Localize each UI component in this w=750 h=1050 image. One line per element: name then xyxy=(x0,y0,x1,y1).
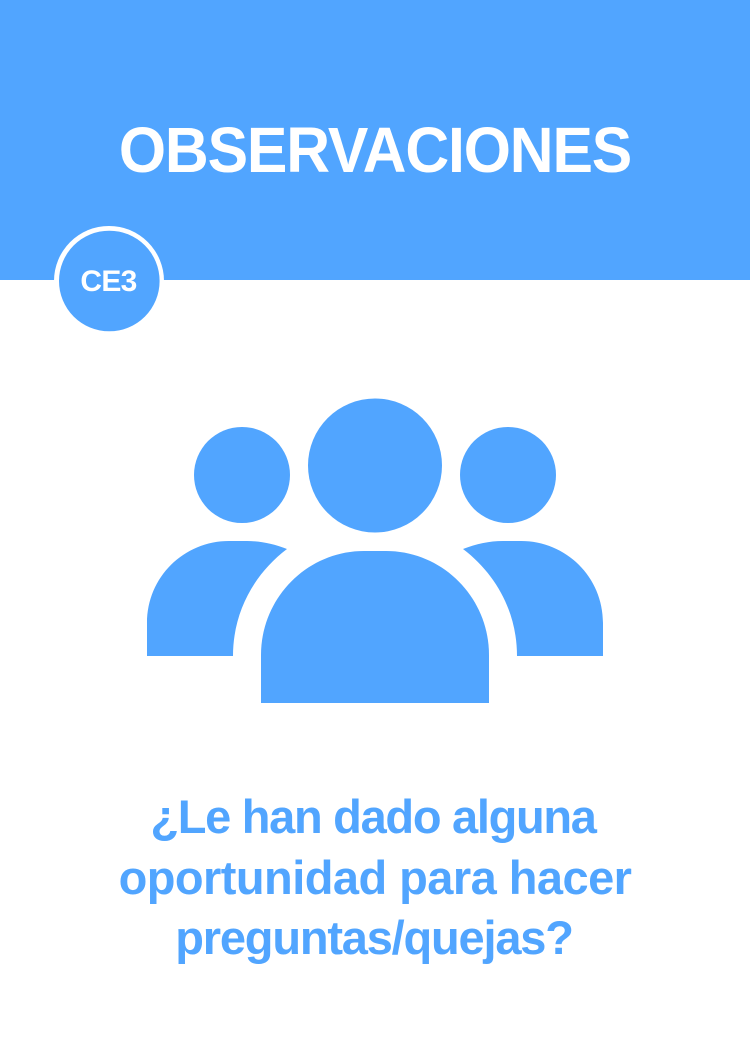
title: OBSERVACIONES xyxy=(119,114,631,186)
header band xyxy=(0,0,750,280)
question text: ¿Le han dado alguna xyxy=(150,790,596,843)
badge label: CE3 xyxy=(80,265,137,298)
badge: CE3 xyxy=(54,226,164,332)
question text: preguntas/quejas? xyxy=(175,911,573,964)
icon: group of people xyxy=(147,398,603,703)
question text: oportunidad para hacer xyxy=(119,850,631,904)
question text xyxy=(119,790,632,964)
